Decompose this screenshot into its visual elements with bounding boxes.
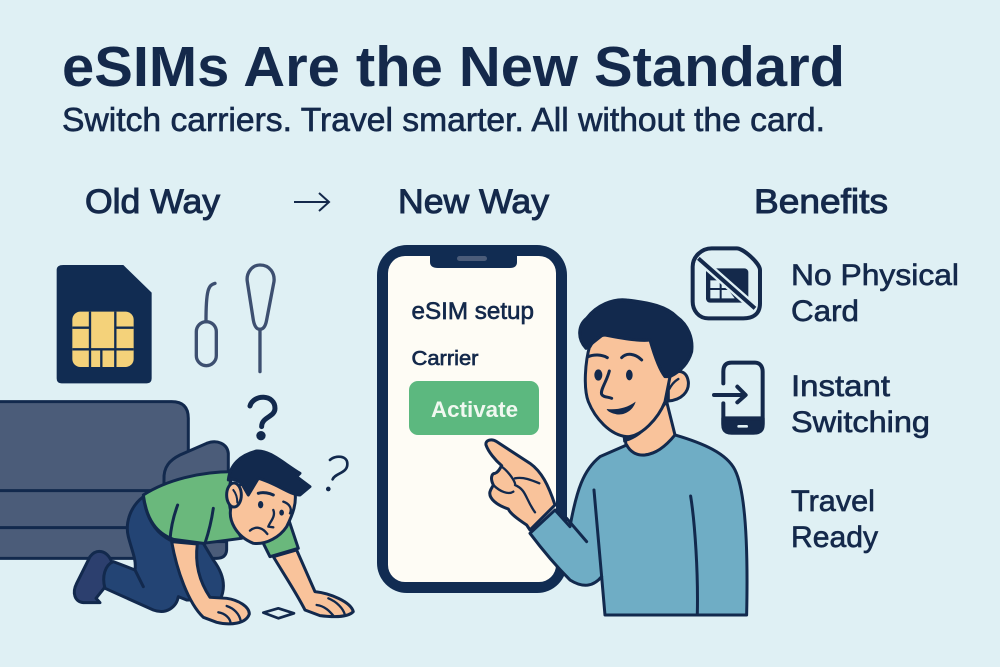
icon: instant switching phone — [714, 363, 763, 433]
benefit label: travel ready: Travel — [791, 485, 875, 518]
right arm and hand — [273, 550, 353, 617]
benefit label: no physical card — [791, 259, 959, 328]
heading: new way: New Way — [398, 183, 549, 221]
pointing hand — [486, 440, 555, 530]
screen heading: eSIM setup — [412, 298, 534, 325]
brows, eyes, nose and smile — [588, 354, 642, 415]
hair — [580, 300, 692, 377]
right fingers — [317, 598, 345, 616]
ear — [668, 371, 688, 401]
finger creases — [493, 467, 539, 512]
benefit label: travel ready — [791, 485, 878, 554]
heading: old way: Old Way — [85, 183, 220, 221]
face — [585, 334, 670, 437]
button label: Activate — [431, 397, 518, 422]
trouser fold — [135, 570, 143, 587]
shirt folds — [170, 505, 213, 543]
heading: benefits: Benefits — [754, 183, 888, 221]
arrow: old to new — [294, 193, 329, 211]
jaw shadow — [623, 421, 652, 442]
left arm and hand — [172, 542, 249, 624]
subtitle: Switch carriers. Travel smarter. All without the card. — [62, 101, 825, 138]
title: eSIMs Are the New Standard — [62, 35, 845, 99]
benefit label: no physical card: Card — [791, 295, 859, 328]
icon: no physical card — [693, 248, 760, 318]
benefit label: instant switching — [791, 370, 930, 439]
icon: large question mark — [250, 397, 275, 440]
benefit label: instant switching: Switching — [791, 406, 930, 439]
benefit label: travel ready: Ready — [791, 521, 878, 554]
left fingers — [218, 606, 241, 624]
shoe — [74, 551, 112, 603]
notch — [430, 256, 517, 268]
hair — [228, 451, 310, 495]
brows, eyes, nose and mouth — [250, 493, 291, 534]
icon: bent paperclip tool — [196, 283, 216, 366]
illustration: sofa — [0, 402, 228, 558]
shirt — [143, 472, 242, 543]
neck — [625, 402, 675, 455]
screen label: Carrier — [412, 348, 479, 370]
icon: physical SIM card — [57, 265, 152, 383]
benefit label: no physical card: No Physical — [791, 259, 959, 292]
benefit label: instant switching: Instant — [791, 370, 891, 403]
illustration: man searching on the floor — [74, 451, 353, 624]
ear — [227, 483, 241, 507]
phone screen — [388, 256, 556, 582]
sweater folds — [567, 490, 697, 615]
phone body — [377, 245, 567, 593]
sweater — [530, 435, 747, 615]
face — [230, 477, 295, 544]
icon: SIM ejector pin — [247, 265, 274, 372]
icon: small question mark — [326, 457, 347, 491]
icon: dropped SIM on floor — [263, 608, 294, 618]
activate button — [409, 381, 539, 435]
speaker — [457, 256, 487, 261]
trousers — [104, 497, 223, 611]
ear detail — [669, 379, 678, 389]
illustration: smiling man pointing — [486, 300, 747, 615]
ear detail — [233, 490, 237, 503]
illustration: smartphone — [377, 245, 567, 593]
right sleeve — [263, 518, 298, 557]
